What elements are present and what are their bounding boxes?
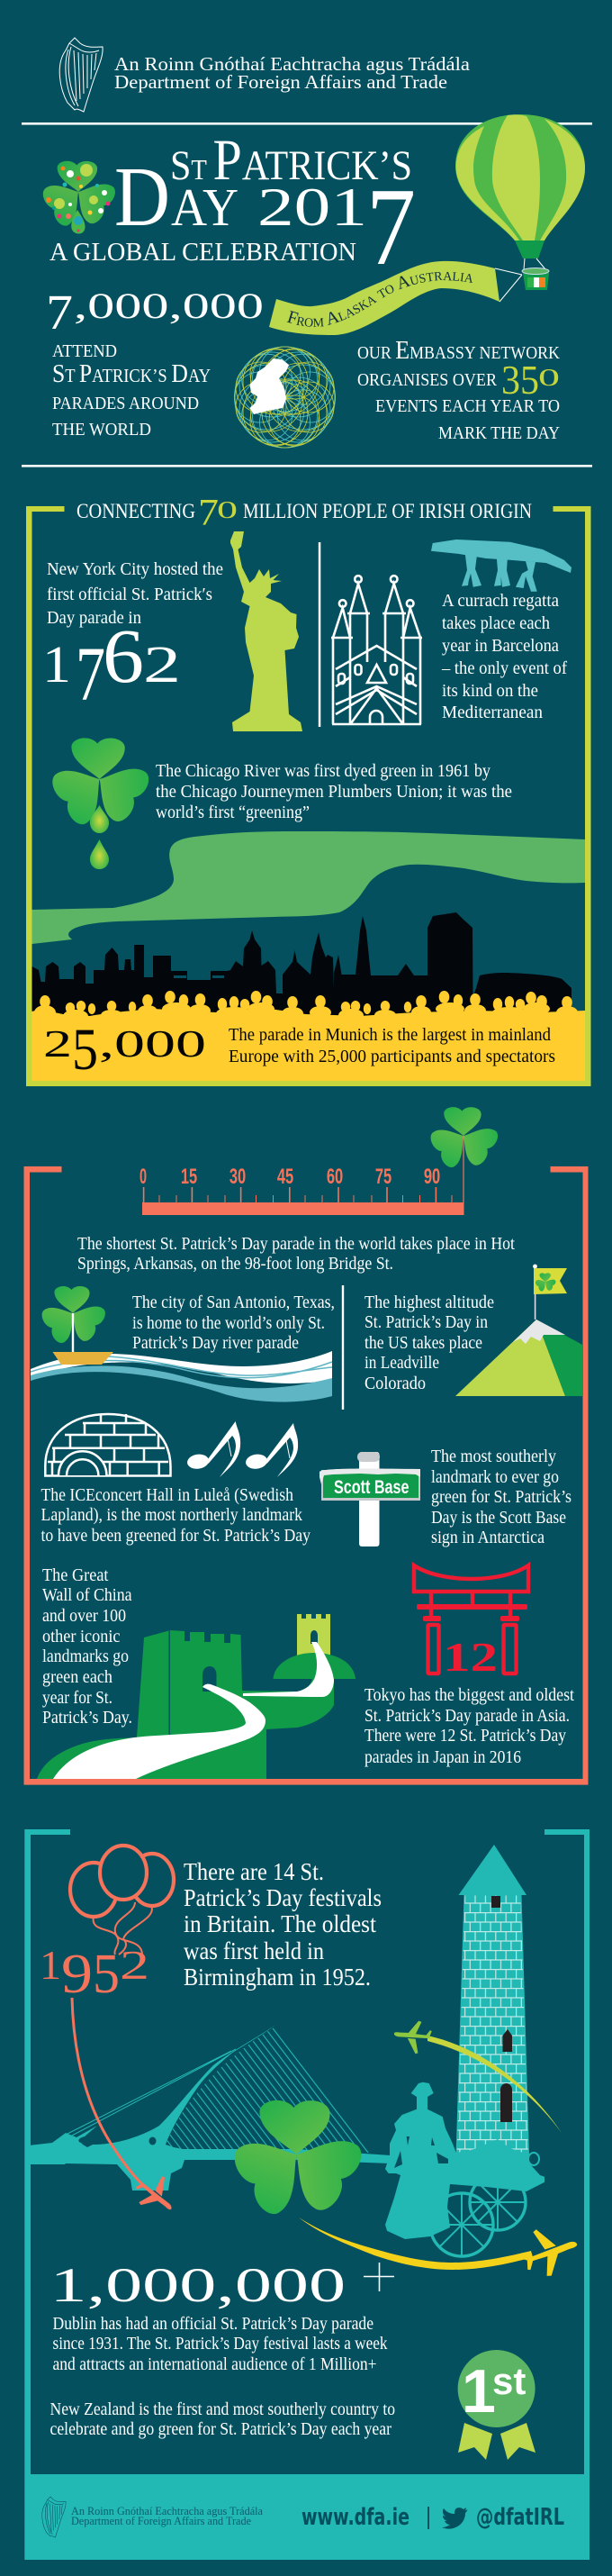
illustration: crowd [32, 991, 585, 1081]
icon: dripping shamrock [48, 738, 153, 869]
arrow: coral plane trail [72, 1998, 184, 2222]
footer department names: An Roinn Gnóthaí Eachtracha agus Trádála [71, 2505, 263, 2517]
icon: torii gate with 12 [414, 1565, 528, 1680]
text: highest altitude: in Leadville [364, 1353, 439, 1373]
panel: festivals and Dublin [24, 1829, 590, 2560]
text: Great Wall: landmarks go [42, 1646, 129, 1666]
text block: embassy network: EVENTS EACH YEAR TO [375, 396, 560, 416]
icon: large shamrock [228, 2100, 367, 2219]
big number: seven million: 7 [46, 285, 73, 340]
text: Munich parade [229, 1025, 555, 1066]
number: 1762 [42, 612, 181, 717]
text: currach regatta [441, 591, 567, 722]
header: department logo [59, 38, 471, 112]
text: Tokyo: St. Patrick’s Day parade in Asia. [364, 1706, 570, 1726]
number: 350: 35 [501, 358, 539, 403]
website: www.dfa.ie [302, 2504, 410, 2531]
text: Great Wall [42, 1565, 132, 1728]
icon: Ireland on spirograph globe [234, 347, 335, 448]
text block: attend parades [52, 341, 211, 440]
text: Chicago river: world’s first “greening” [156, 803, 310, 822]
text: Munich parade: The parade in Munich is the largest in mainland [229, 1025, 551, 1045]
text: Great Wall: Patrick’s Day. [42, 1708, 132, 1728]
title: 7 [366, 165, 416, 288]
number: 1952: 1 [40, 1943, 61, 1988]
text: highest altitude: Colorado [364, 1374, 426, 1393]
arrow: green plane trail [392, 2017, 562, 2133]
footer department names: Department of Foreign Affairs and Trade [71, 2515, 251, 2527]
text: highest altitude: St. Patrick’s Day in [364, 1312, 488, 1332]
text: ICEconcert Hall: to have been greened for St. Patrick’s Day [41, 1526, 310, 1546]
text: Tokyo: Tokyo has the biggest and oldest [364, 1685, 574, 1705]
panel: shortest parades and landmarks [23, 1107, 589, 1785]
text block: attend parades: ST PATRICK’S DAY [52, 359, 211, 388]
subtitle: A GLOBAL CELEBRATION [50, 239, 356, 267]
text: highest altitude: the US takes place [364, 1333, 482, 1353]
text: shortest parade [77, 1234, 515, 1274]
text: Chicago river: the Chicago Journeymen Plumbers Union; it was the [156, 782, 512, 802]
big number: seven million: ,000,000 [74, 286, 264, 326]
heading: 0 [217, 496, 238, 523]
text: currach regatta: takes place each [442, 613, 550, 633]
ruler chart: 60 [327, 1165, 343, 1189]
ruler chart: 45 [277, 1165, 293, 1189]
heading: 7 [198, 493, 219, 534]
number: 1762: 7 [76, 630, 105, 717]
icon: balloons [70, 1846, 174, 1962]
text: San Antonio: is home to the world’s only St. [132, 1313, 325, 1333]
number: 350 [501, 358, 560, 403]
icon: shamrock boat on river [31, 1286, 332, 1401]
icon: multicoloured shamrock [40, 161, 119, 234]
number: 25,000: ,000 [99, 1024, 206, 1066]
title [114, 128, 416, 288]
text: New Zealand: New Zealand is the first and most southerly country to [50, 2399, 395, 2419]
number: 25,000 [43, 1017, 206, 1083]
text: San Antonio: Patrick’s Day river parade [132, 1333, 299, 1353]
icon: Great Wall of China [37, 1614, 356, 1779]
text: highest altitude: The highest altitude [364, 1293, 494, 1312]
icon: Scott Base sign [320, 1452, 420, 1547]
text: Dublin parade: and attracts an international audience of 1 Million+ [52, 2354, 376, 2374]
icon: ice igloo [45, 1414, 171, 1475]
icon: first place badge [458, 2350, 536, 2460]
number: 1762: 1 [42, 635, 71, 694]
icon: torii gate with 12: 12 [443, 1634, 498, 1680]
icon: shamrock on ruler [428, 1107, 501, 1203]
heading [76, 493, 532, 534]
text: Tokyo: parades in Japan in 2016 [364, 1747, 521, 1767]
heading: MILLION PEOPLE OF IRISH ORIGIN [243, 500, 532, 522]
text: San Antonio: The city of San Antonio, Texas, [132, 1293, 335, 1312]
text: festivals in Britain [184, 1858, 382, 1991]
text: highest altitude [364, 1293, 494, 1393]
text block: embassy network: OUR EMBASSY NETWORK [357, 336, 560, 365]
text: Great Wall: year for St. [42, 1688, 112, 1708]
text: New Zealand [50, 2399, 395, 2439]
title: D [114, 150, 170, 244]
icon: Samuel Beckett bridge [31, 2025, 391, 2191]
text: New York: New York City hosted the [47, 559, 223, 579]
text: shortest parade: The shortest St. Patrick’s Day parade in the world takes place in Hot [77, 1234, 515, 1254]
text block: embassy network: ORGANISES OVER [357, 370, 498, 390]
illustration: Munich skyline [32, 912, 572, 1018]
text: ICEconcert Hall [41, 1485, 310, 1546]
text: currach regatta: year in Barcelona [442, 636, 559, 656]
text block: attend parades: ATTEND [52, 341, 117, 361]
ruler chart: 30 [230, 1165, 246, 1189]
ribbon: from Alaska to Australia: From Alaska to Australia [286, 272, 473, 327]
icon: first place badge: st [492, 2360, 526, 2402]
text: most southerly: Day is the Scott Base [431, 1508, 566, 1528]
icon: round tower [456, 1845, 529, 2157]
footer [42, 2497, 564, 2537]
icon: Molly Malone with cart [385, 2082, 544, 2256]
title: AY [171, 177, 238, 237]
twitter handle: @dfatIRL [476, 2504, 564, 2531]
text: Tokyo: There were 12 St. Patrick’s Day [364, 1726, 566, 1746]
ruler chart: 15 [181, 1165, 197, 1189]
text block: attend parades: THE WORLD [52, 420, 151, 440]
panel: connecting 70 million [26, 493, 590, 1086]
text: Dublin parade: since 1931. The St. Patrick’s Day festival lasts a week [52, 2334, 387, 2354]
text: shortest parade: Springs, Arkansas, on the 98-foot long Bridge St. [77, 1254, 393, 1274]
text: Great Wall: The Great [42, 1565, 109, 1585]
text: most southerly: The most southerly [431, 1447, 556, 1466]
text: currach regatta: its kind on the [442, 681, 538, 701]
text: Chicago river [156, 761, 512, 822]
icon: first place badge: 1 [462, 2357, 496, 2426]
arrow: yellow plane trail [299, 2218, 583, 2281]
department names: An Roinn Gnóthaí Eachtracha agus Trádála [114, 53, 471, 75]
text: currach regatta: Mediterranean [442, 703, 543, 722]
number: 1,000,000+ [50, 2258, 394, 2312]
text: San Antonio [132, 1293, 335, 1353]
text: festivals in Britain: was first held in [184, 1937, 324, 1964]
big number: seven million [46, 285, 264, 340]
text block: embassy network [357, 336, 560, 443]
ruler chart: 75 [375, 1165, 392, 1189]
department names [114, 53, 471, 93]
number: 1952: 2 [120, 1943, 149, 1988]
text: Great Wall: Wall of China [42, 1585, 132, 1605]
icon: Sagrada Familia [331, 576, 422, 724]
number: 1952: 9 [61, 1944, 93, 2005]
text: most southerly: sign in Antarctica [431, 1528, 544, 1547]
ruler chart [140, 1165, 464, 1215]
text: Tokyo [364, 1685, 574, 1767]
text: New York: first official St. Patrick′s [47, 585, 212, 604]
heading: CONNECTING [76, 500, 195, 522]
text: New York [47, 559, 223, 628]
text: most southerly: green for St. Patrick’s [431, 1487, 572, 1507]
department names: Department of Foreign Affairs and Trade [114, 71, 447, 93]
icon: harp [59, 38, 103, 112]
text: ICEconcert Hall: Lapland), is the most northerly landmark [41, 1505, 302, 1525]
footer department names [71, 2505, 263, 2527]
number: 25,000: 5 [72, 1017, 98, 1083]
icon: Scott Base sign: Scott Base [334, 1477, 409, 1498]
icon: mountain with flag [455, 1265, 582, 1396]
text: Dublin parade [52, 2314, 387, 2374]
icon: music notes [186, 1421, 298, 1477]
icon: footer harp [42, 2497, 66, 2537]
text block: attend parades: PARADES AROUND [52, 394, 199, 413]
text: festivals in Britain: Patrick’s Day festivals [184, 1884, 382, 1911]
number: 1762: 6 [103, 612, 144, 699]
text: Chicago river: The Chicago River was first dyed green in 1961 by [156, 761, 490, 781]
text: currach regatta: – the only event of [441, 658, 567, 678]
ruler chart: 0 [140, 1165, 147, 1189]
icon: twitter bird [442, 2508, 468, 2529]
text: festivals in Britain: Birmingham in 1952. [184, 1964, 371, 1991]
text: currach regatta: A currach regatta [442, 591, 559, 611]
number: 1762: 2 [143, 635, 181, 694]
text block: embassy network: MARK THE DAY [438, 423, 560, 443]
number: 1,000,000+: 1,000,000 [50, 2258, 346, 2312]
number: 350: 0 [538, 364, 560, 391]
text: most southerly: landmark to ever go [431, 1467, 559, 1487]
text: New York: Day parade in [47, 608, 141, 628]
icon: currach carriers [431, 540, 572, 592]
ruler chart: 90 [424, 1165, 440, 1189]
illustration: green river [32, 831, 585, 944]
text: New Zealand: celebrate and go green for St. Patrick’s Day each year [50, 2419, 392, 2439]
text: festivals in Britain: There are 14 St. [184, 1858, 324, 1885]
number: 1952 [40, 1943, 149, 2005]
icon: Statue of Liberty [230, 531, 302, 731]
text: Dublin parade: Dublin has had an official St. Patrick’s Day parade [52, 2314, 374, 2334]
icon: hot air balloon [455, 114, 585, 302]
text: ICEconcert Hall: The ICEconcert Hall in Luleå (Swedish [41, 1485, 293, 1505]
text: festivals in Britain: in Britain. The oldest [184, 1910, 376, 1937]
text: Great Wall: and over 100 [42, 1606, 126, 1626]
title: 201 [257, 177, 367, 237]
text: Great Wall: green each [42, 1667, 112, 1687]
number: 25,000: 2 [43, 1024, 72, 1066]
text: most southerly [431, 1447, 572, 1547]
number: 1952: 5 [93, 1944, 120, 2005]
title: ST PATRICK’S [170, 128, 412, 193]
text: Munich parade: Europe with 25,000 participants and spectators [229, 1047, 555, 1066]
text: Great Wall: other iconic [42, 1627, 121, 1646]
